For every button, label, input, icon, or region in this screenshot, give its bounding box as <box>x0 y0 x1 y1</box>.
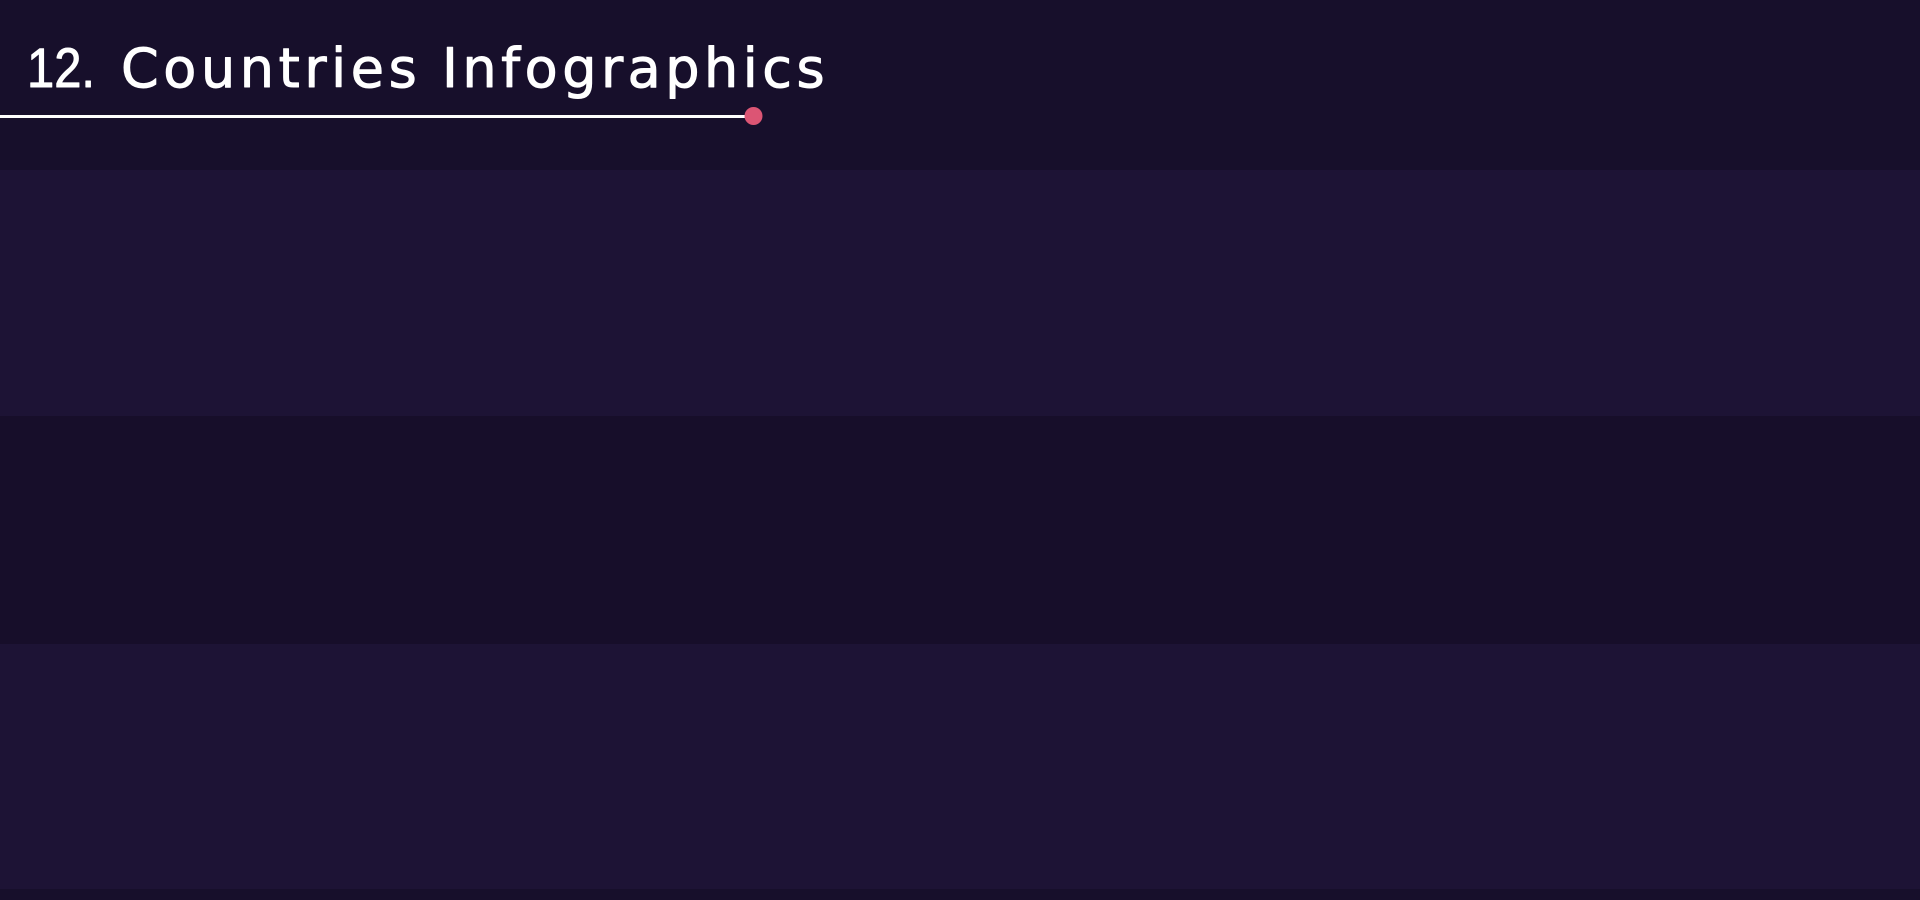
header: title with underline <box>0 36 829 125</box>
underline <box>0 115 746 118</box>
band: middle dark panel <box>0 416 1920 644</box>
title: Countries <box>121 37 421 100</box>
band: lower light panel <box>0 644 1920 889</box>
title: 12. <box>27 36 95 99</box>
title: Infographics <box>442 37 829 100</box>
marker dot <box>744 107 762 125</box>
title <box>27 36 829 100</box>
band: upper light panel <box>0 170 1920 416</box>
